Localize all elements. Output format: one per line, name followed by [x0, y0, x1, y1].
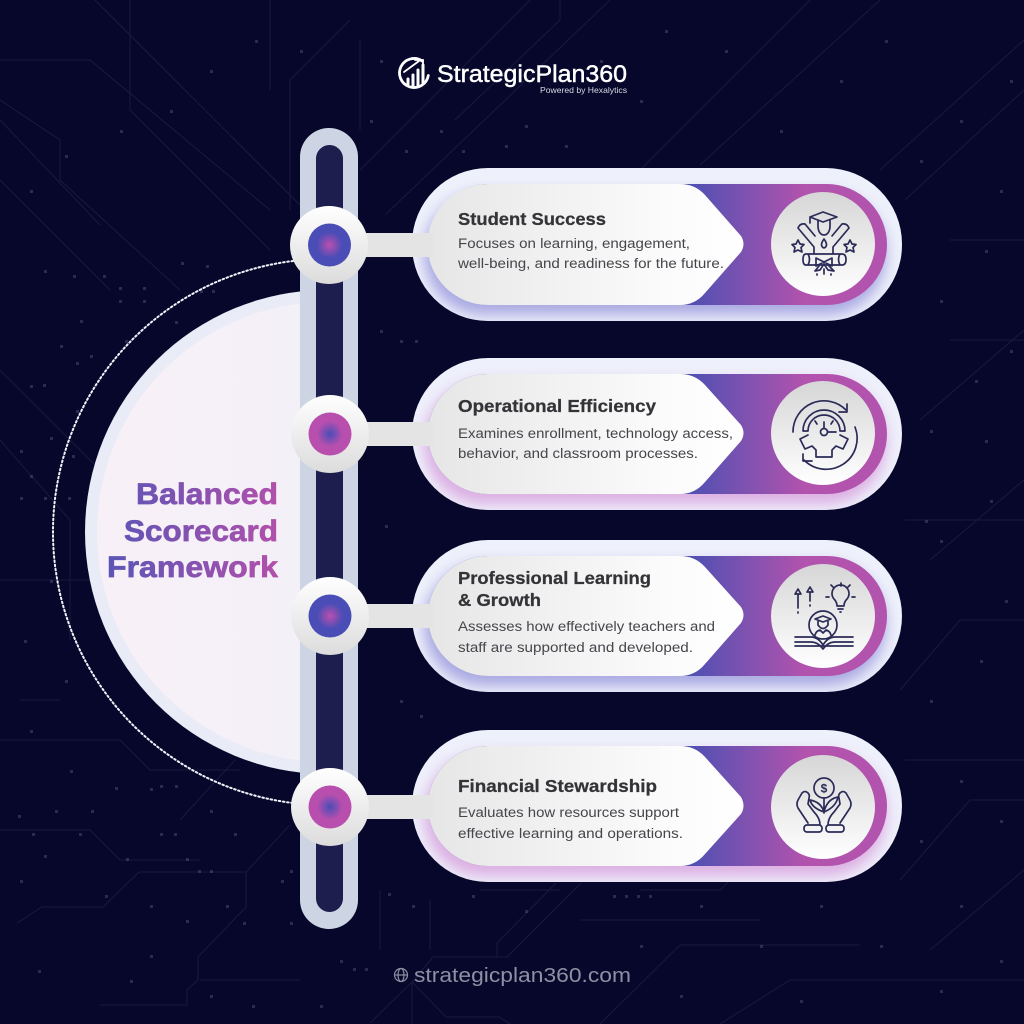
card: Professional Learning & Growth: staff are supported and developed.	[458, 640, 693, 655]
card: Operational Efficiency: Operational Efficiency	[458, 396, 656, 416]
card: Professional Learning & Growth: Assesses how effectively teachers and	[458, 619, 715, 634]
icon: growth arrows, lightbulb, learner and book	[795, 583, 855, 649]
card: Professional Learning & Growth	[412, 540, 902, 692]
logo: Powered by Hexalytics	[540, 85, 627, 95]
card: Professional Learning & Growth: & Growth	[458, 590, 541, 610]
card: Operational Efficiency: Examines enrollment, technology access,	[458, 426, 733, 441]
node 1	[290, 206, 368, 284]
heading: Balanced Scorecard Framework: Scorecard	[124, 515, 278, 548]
card: Student Success: Student Success	[458, 209, 606, 229]
icon: hands holding a dollar plant: $	[821, 782, 828, 796]
card: Financial Stewardship: effective learning and operations.	[458, 826, 683, 841]
icon: gauge, gear and cycle arrows	[793, 401, 857, 469]
card: Student Success: well-being, and readiness for the future.	[457, 256, 724, 271]
node 4	[291, 768, 369, 846]
icon: globe	[394, 968, 408, 982]
icon: hands holding a dollar plant	[797, 778, 851, 832]
heading: Balanced Scorecard Framework: Framework	[107, 551, 279, 584]
card: Student Success	[412, 168, 902, 321]
card: Operational Efficiency: behavior, and classroom processes.	[458, 446, 698, 461]
icon: graduate with scroll	[792, 212, 856, 275]
heading: Balanced Scorecard Framework	[107, 478, 279, 584]
card: Financial Stewardship	[412, 730, 902, 882]
card: Financial Stewardship: Financial Stewardship	[458, 776, 657, 796]
card: Financial Stewardship: Evaluates how resources support	[458, 805, 679, 820]
logo mark	[400, 59, 428, 88]
dotted orbit arc	[53, 261, 293, 803]
vertical track	[300, 128, 358, 929]
footer website: strategicplan360.com	[414, 965, 631, 987]
card: Student Success: Focuses on learning, engagement,	[458, 236, 690, 251]
heading: Balanced Scorecard Framework: Balanced	[136, 478, 278, 511]
semicircle panel	[85, 292, 300, 772]
timeline nodes	[290, 206, 369, 846]
card: Professional Learning & Growth: Professional Learning	[458, 568, 651, 588]
logo	[400, 59, 627, 95]
connectors	[355, 233, 433, 819]
logo: StrategicPlan360	[437, 61, 627, 88]
node 2	[291, 395, 369, 473]
card: Operational Efficiency	[412, 358, 902, 510]
node 3	[291, 577, 369, 655]
